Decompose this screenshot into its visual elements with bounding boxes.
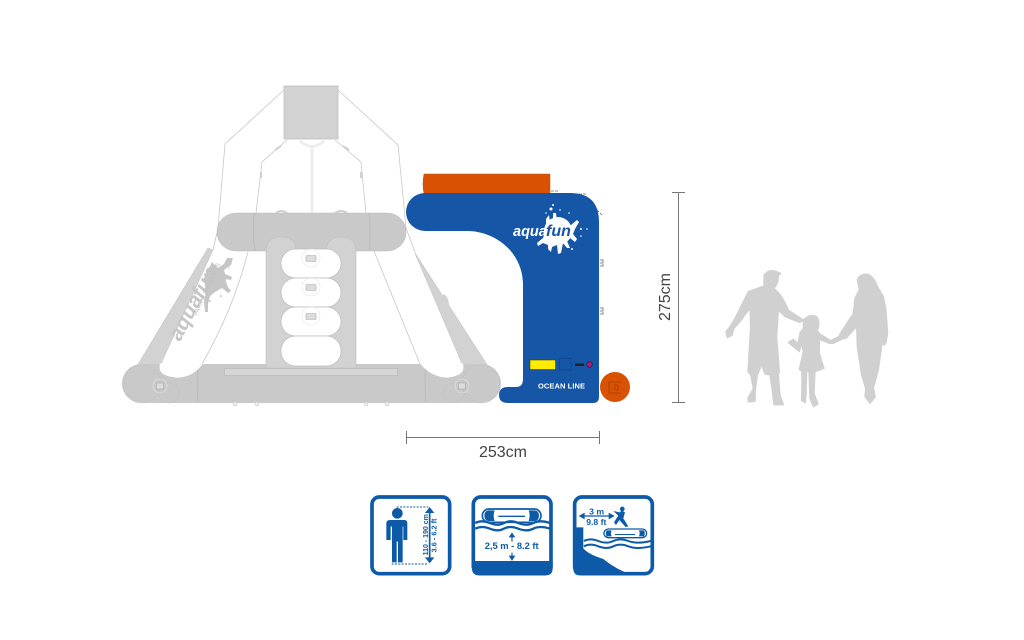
left panel outline [202,228,248,364]
icons row [372,497,652,575]
left foot cut-out [160,364,203,378]
logo splash [537,204,588,254]
left leg bump [174,296,184,312]
right foot cut-out [420,364,463,378]
left leg [137,248,213,366]
height label: 275cm [657,273,674,321]
girl [788,316,844,407]
small box [560,358,571,370]
faded logo: PARK & PRODUCTS [193,262,222,317]
top cross tube [217,213,406,251]
logo wordmark aqua: aqua [513,224,547,240]
icon: jump distance: 9.8 ft [586,517,607,527]
base bottom lugs [233,402,389,406]
slide, side view [406,174,630,403]
shoulder bumps [261,146,361,213]
logo wordmark fun: fun [546,223,571,240]
faded logo [164,258,233,344]
orange top pad [423,174,550,194]
Y strap [300,141,324,213]
icon: water depth [472,497,553,575]
width label: 253cm [479,444,527,461]
top platform square [284,86,338,139]
height dimension [657,192,685,403]
blue slide body [406,193,599,403]
handle loops [551,191,603,314]
right leg [415,253,488,366]
base strip [224,368,398,376]
step handles [156,256,466,389]
faded slide, front view [122,86,501,406]
width dimension [406,431,600,461]
model name: OCEAN LINE [538,382,585,390]
base tube [122,364,501,403]
ladder frame [266,237,356,368]
man [726,271,803,405]
outer side lines [218,90,406,228]
right leg bump [441,294,449,308]
ladder steps [281,249,341,366]
icon: water depth: 2,5 m - 8.2 ft [485,541,539,551]
icon: user height [372,497,450,574]
yellow label [530,360,556,370]
woman [839,274,888,403]
family silhouette [726,271,888,407]
icon: jump distance [573,497,652,575]
dotted seam circles [123,365,500,403]
step handle rings [153,249,469,393]
icon: jump distance: 3 m [589,506,604,516]
drum bracket [609,382,621,393]
faded logo: fun [187,263,223,302]
right panel outline [374,228,420,364]
faded logo: aqua [164,290,208,344]
icon: user height: 3.6 - 6.2 ft [429,518,438,552]
icon: user height: 110 - 190 cm [423,514,430,555]
magenta valve [587,362,592,367]
black bar [575,364,584,366]
orange drum [600,372,630,402]
